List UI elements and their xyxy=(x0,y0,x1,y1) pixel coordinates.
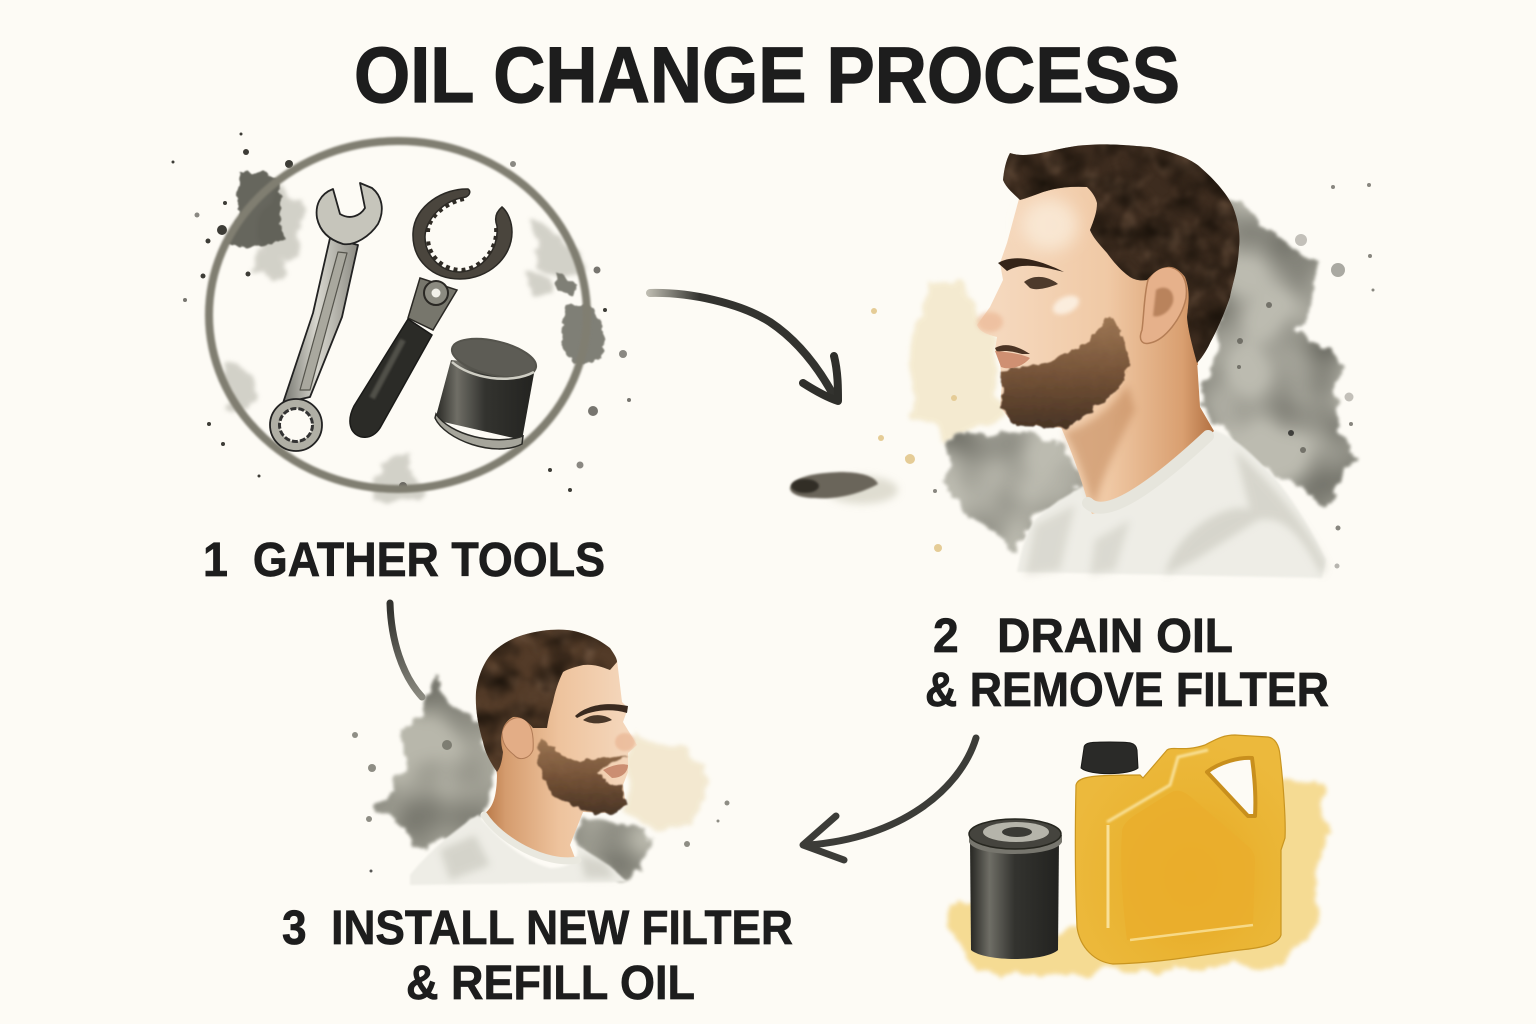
lips xyxy=(995,351,1030,368)
beard xyxy=(537,738,628,815)
lips xyxy=(603,764,628,778)
jug cap xyxy=(1081,742,1138,774)
step 2 label xyxy=(925,610,1329,717)
ink splatter dots xyxy=(172,132,631,492)
icon: oil filter xyxy=(435,332,540,449)
t-shirt xyxy=(1017,430,1326,578)
arrow: step 1 to step 2 xyxy=(650,293,838,401)
step 3 label: 3 INSTALL NEW FILTER xyxy=(282,902,793,955)
moustache xyxy=(995,345,1030,354)
ear xyxy=(502,718,533,759)
panel: oil jug and filter xyxy=(945,735,1328,975)
step 3 label xyxy=(282,902,793,1010)
jug handle hole xyxy=(1207,758,1255,816)
hair xyxy=(1003,144,1239,363)
step 2 label: & REMOVE FILTER xyxy=(925,664,1329,717)
panel: step 3 man portrait xyxy=(352,630,730,885)
hair xyxy=(476,630,617,772)
arrow: step 1 to step 3 curve xyxy=(390,603,422,697)
beard xyxy=(1000,317,1131,428)
shirt collar xyxy=(484,815,578,861)
watercolor wash behind man xyxy=(871,183,1374,568)
nose tint xyxy=(615,733,635,751)
arrow: step 2 to step 3 xyxy=(803,738,976,860)
yellow watercolor stain xyxy=(945,780,1328,975)
nose tint xyxy=(977,312,1003,332)
icon: filter wrench xyxy=(350,189,512,437)
step 1 label: 1 GATHER TOOLS xyxy=(203,534,605,587)
cheek highlight xyxy=(1050,292,1082,318)
step 3 label: & REFILL OIL xyxy=(406,957,695,1010)
face xyxy=(977,176,1198,428)
title: OIL CHANGE PROCESS xyxy=(354,30,1180,119)
eye and brow xyxy=(575,704,628,723)
step 2 label: 2 DRAIN OIL xyxy=(933,610,1233,663)
ink smudge xyxy=(790,472,898,504)
icon: combination wrench xyxy=(270,183,382,451)
icon: black oil filter xyxy=(969,819,1062,959)
shirt collar xyxy=(1088,436,1208,508)
panel: step 2 man portrait xyxy=(871,144,1374,578)
watercolor stains around tool circle xyxy=(172,132,631,500)
eye and brow xyxy=(998,258,1064,289)
neck xyxy=(483,770,583,862)
jug highlights xyxy=(1107,750,1208,822)
face xyxy=(490,650,637,813)
icon: yellow oil jug xyxy=(1075,735,1285,964)
ring outline xyxy=(209,141,587,489)
neck shadow xyxy=(1064,385,1135,508)
forehead highlight xyxy=(1022,199,1078,251)
t-shirt xyxy=(410,815,627,885)
ear xyxy=(1140,267,1186,343)
neck xyxy=(1060,335,1214,514)
watercolor wash behind small man xyxy=(352,680,730,882)
panel: step 1 gather tools xyxy=(172,132,631,500)
